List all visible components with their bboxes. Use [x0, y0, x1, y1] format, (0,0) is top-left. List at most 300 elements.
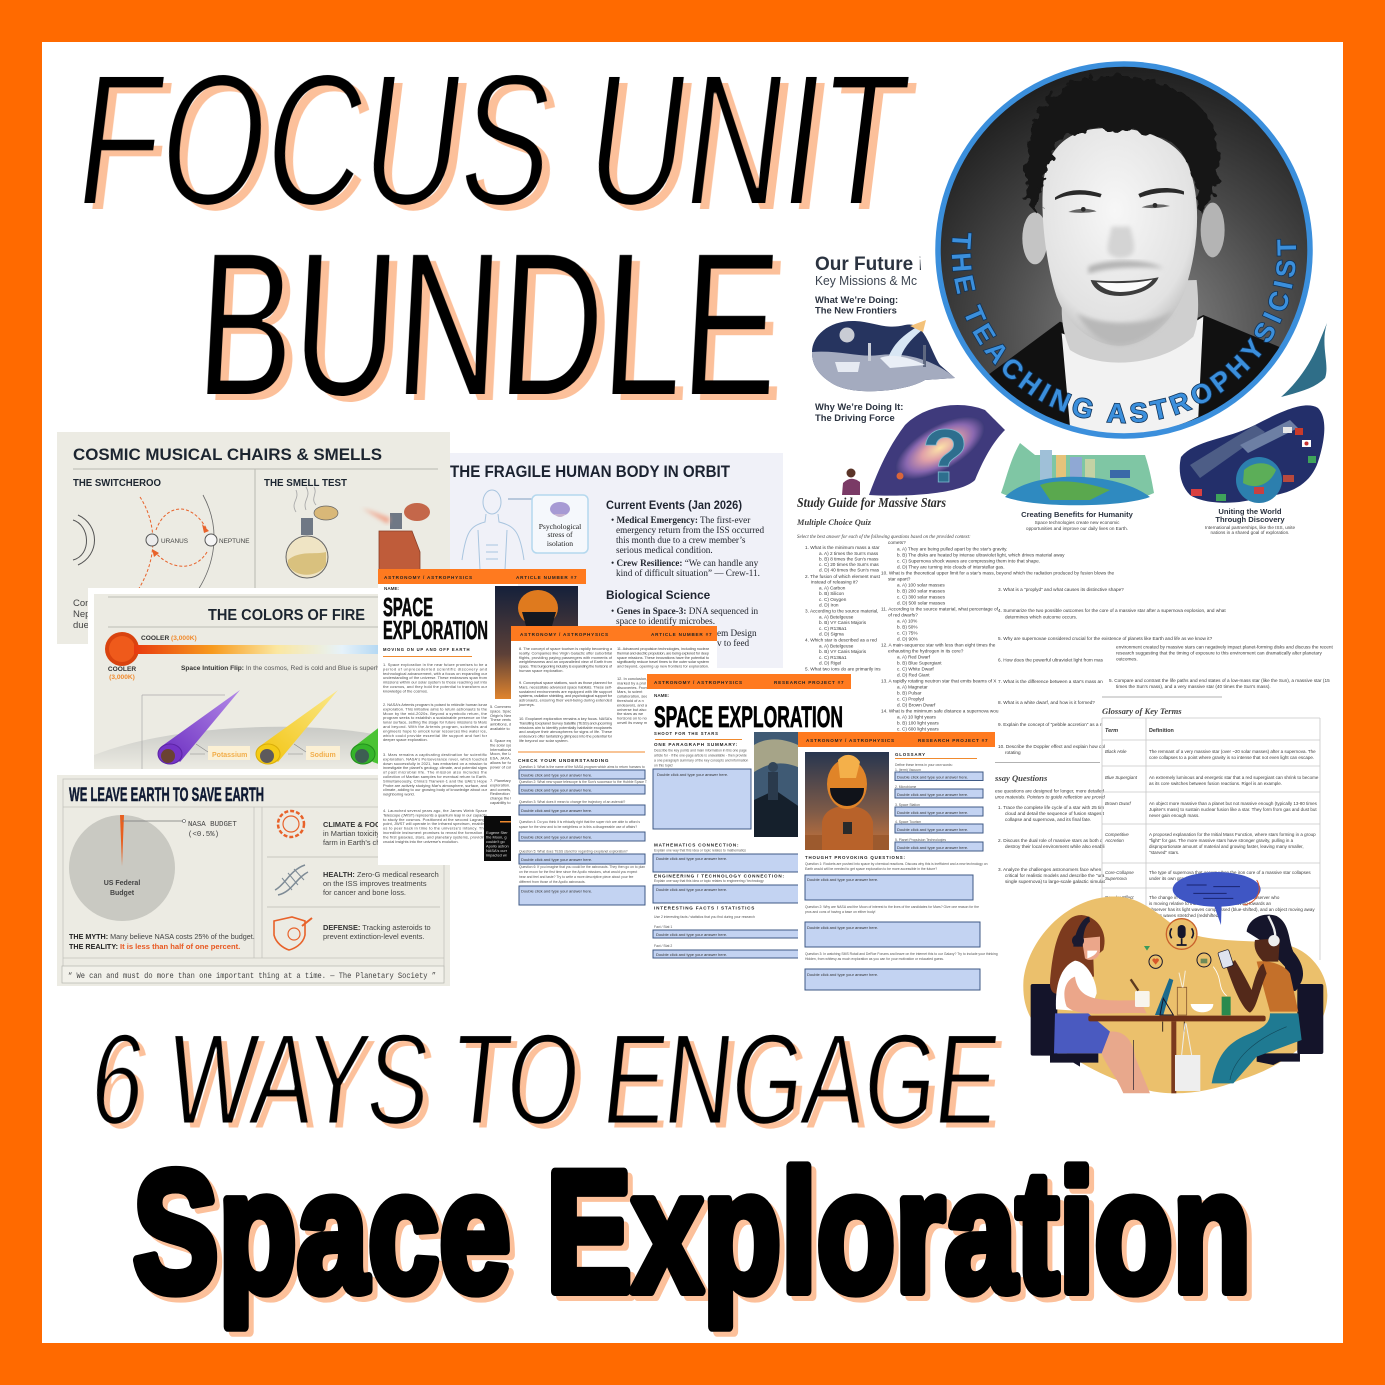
illustration: green city and earth — [1001, 443, 1154, 505]
quiz column two: exhausting the hydrogen in its core? — [888, 648, 964, 654]
check your understanding: CHECK YOUR UNDERSTANDING — [518, 758, 609, 763]
second column: Origin's New Gle — [490, 713, 519, 718]
callout: psychological stress of isolation: Psychological — [539, 522, 581, 531]
icon: microphone — [1166, 919, 1197, 949]
text block: current events: Current Events (Jan 2026) — [606, 498, 742, 512]
glossary of key terms table: Brown Dwarf — [1105, 801, 1132, 806]
glossary of key terms table: Definition — [1149, 728, 1174, 734]
article text: 9. Conceptual space stations, such as those planned for — [519, 680, 613, 685]
ROI row: health — [275, 865, 439, 897]
quiz column one: a. A) Betelgeuse — [819, 614, 854, 620]
glossary section: 1. (term) Vacuum — [895, 768, 921, 772]
header bar: ASTRONOMY / ASTROPHYSICS — [384, 575, 473, 580]
short answer questions: 10. Describe the Doppler effect and explain how col — [998, 744, 1105, 749]
glossary of key terms table — [1102, 706, 1320, 960]
article text: 1. Space exploration in the near future promises to be a — [383, 662, 488, 667]
illustration: lighthouse sliver — [1281, 323, 1327, 397]
essay questions: single supernova) to large-scale galactic simulat — [1005, 879, 1105, 884]
summary section: ONE PARAGRAPH SUMMARY: — [654, 742, 738, 747]
thought provoking questions — [805, 855, 998, 990]
glossary of key terms table: Doppler Effect — [1105, 895, 1134, 900]
glossary of key terms table: Competitive — [1105, 832, 1129, 837]
subheading: what we're doing — [815, 294, 898, 316]
icon: red perfume bottle — [362, 503, 430, 590]
label: cooler bar: COOLER (3,000K) — [141, 635, 197, 642]
header bar — [647, 674, 851, 689]
ROI row: climate and food: in Martian toxicity — [323, 829, 380, 838]
check your understanding: Question 2: What new space telescope is the Sun's successor to the Hubble Space T — [519, 780, 647, 784]
worksheet: article page two — [511, 626, 717, 907]
quiz column two: b. B) Blue Supergiant — [897, 660, 942, 666]
article text: point, JWST will operate in the infrared spectrum, enabling — [383, 821, 487, 826]
interesting facts: Use 2 interesting facts / statistics that you find during your research — [654, 915, 755, 919]
article text: flights, providing paying passengers with moments of — [519, 655, 613, 660]
article text: missions aim to identify potentially habitable exoplanets — [519, 725, 612, 730]
quote — [62, 966, 444, 983]
caption: creating benefits: Creating Benefits for Humanity — [1021, 510, 1134, 519]
panel: cosmic musical chairs and smells: Nep — [73, 609, 90, 620]
glossary of key terms table: Accretion — [1104, 838, 1124, 843]
thought provoking questions: THOUGHT PROVOKING QUESTIONS: — [805, 855, 906, 860]
mathematics connection: MATHEMATICS CONNECTION: — [654, 842, 739, 848]
header bar — [511, 626, 717, 641]
panel: our future in space — [800, 240, 1335, 535]
interesting facts — [653, 906, 800, 958]
glossary of key terms table: never gain enough mass. — [1149, 813, 1200, 818]
essay questions: urce materials. Pointers to guide reflection are provid — [995, 794, 1105, 800]
quiz column one: 1. What is the minimum mass a star — [805, 545, 880, 550]
ROI row: climate and food: farm in Earth’s cha — [323, 838, 385, 847]
short answer questions: rotating — [1005, 750, 1021, 755]
ROI row: defense — [274, 917, 431, 950]
article text: threshold of a n — [617, 698, 644, 703]
glossary of key terms table: as its core switches between fusion reactions. Rigel is an example. — [1149, 781, 1282, 786]
quiz column one: a. A) Betelgeuse — [819, 644, 854, 648]
article text: climate, adding to our growing body of knowledge about our — [383, 787, 488, 792]
article text: collection of Martian samples for eventual return to Earth. — [383, 774, 487, 779]
photo: astronaut in orange suit — [805, 752, 889, 850]
article text: Simultaneously, China's Tianwen-1 and the UAE's Hope — [383, 778, 487, 783]
quiz column two: 13. A rapidly rotating neutron star that emits beams of X — [881, 678, 997, 684]
subheading: why we're doing it: Why We’re Doing It: — [815, 401, 903, 412]
heading: study guide: Study Guide for Massive Stars — [797, 495, 946, 510]
panel: cosmic musical chairs and smells — [57, 432, 450, 644]
engineering connection — [653, 874, 800, 903]
second column: change the traje — [490, 796, 518, 801]
second column: 5. Commercial s — [490, 704, 518, 709]
panel: cosmic musical chairs and smells: due — [73, 620, 89, 631]
text: myth and reality: THE REALITY: It is less than half of one percent. — [69, 942, 240, 951]
black callout box: couldn't go — [486, 839, 505, 844]
article text: 8. The concept of space tourism is rapidly becoming a — [519, 646, 613, 651]
quiz column one: a. A) Carbon — [819, 586, 846, 590]
ROI row: health: on the ISS improves treatments — [323, 879, 427, 888]
article text: exploration. NASA's Perseverance rover, which touched — [383, 756, 487, 761]
summary section: Double click and type your answer here. — [657, 772, 728, 777]
subheading: the switcheroo: THE SWITCHEROO — [73, 478, 161, 489]
second column: available to eve — [490, 726, 517, 731]
yellow blob background — [1023, 897, 1327, 1093]
article text: life beyond our solar system. — [519, 738, 569, 743]
ROI row: defense: DEFENSE: Tracking asteroids to — [323, 923, 431, 932]
glossary section — [895, 752, 983, 851]
quiz column one: b. B) Silicon — [819, 591, 844, 596]
article text: program seeks to establish a sustainable presence on the — [383, 715, 487, 720]
check your understanding: Question 6: If you imagine that you could be the astronauts. They then go on to plan — [519, 865, 645, 869]
icon: purple comet potassium — [158, 690, 250, 764]
quiz column two: b. B) Pulsar — [897, 690, 922, 696]
article text: the stars as we — [617, 711, 643, 716]
quiz column two: c. C) Proplyd — [897, 696, 924, 702]
chart: federal budget pie: (<0.5%) — [188, 831, 219, 839]
article text: neighboring world. — [383, 792, 415, 797]
quiz column one: d. D) Sigma — [819, 632, 844, 636]
interesting facts: INTERESTING FACTS / STATISTICS — [654, 906, 755, 910]
glossary section: GLOSSARY — [895, 752, 926, 757]
quiz column two: d. D) Brown Dwarf — [897, 702, 936, 708]
quiz column one — [805, 545, 881, 672]
glossary of key terms table: Glossary of Key Terms — [1102, 706, 1182, 716]
second column: allows for future — [490, 760, 517, 765]
glossary of key terms table: Supernova — [1105, 876, 1127, 881]
article text: period of unprecedented scientific discovery and — [383, 666, 487, 671]
curved badge name: THE TEACHING ASTROPHYSICIST — [951, 232, 1297, 424]
glossary of key terms table: is moving relative to the source. An object moving towards an — [1149, 901, 1272, 906]
chart: federal budget pie: Budget — [110, 890, 135, 897]
header bar — [798, 732, 995, 747]
text: myth and reality: THE MYTH: Many believe NASA costs 25% of the budget. — [69, 932, 255, 941]
article text: 2. NASA's Artemis program is poised to rekindle human lunar — [383, 702, 488, 707]
essay questions — [994, 773, 1105, 884]
caption: creating benefits: Space technologies create new economic — [1035, 520, 1120, 525]
illustration: galaxy question mark — [869, 404, 1005, 499]
header bar: ASTRONOMY / ASTROPHYSICS — [806, 738, 895, 743]
quiz column two: 11. According to the source material, what percentage of — [881, 606, 999, 612]
quiz column one: 3. According to the source material, — [805, 608, 878, 614]
article text: which could provide essential life support and fuel for — [383, 733, 488, 738]
callout: psychological stress of isolation — [532, 495, 588, 553]
second column: International sp — [490, 747, 517, 752]
article text: Transiting Exoplanet Survey Satellite (TESS) and upcoming — [519, 720, 612, 725]
article title: SPACE — [383, 592, 433, 622]
diagram: Uranus and Neptune orbit swap — [73, 495, 250, 590]
article text: down successfully in 2021, has embarked on a mission to — [383, 761, 487, 766]
quiz column two: 12. A main-sequence star with less than eight times the — [881, 642, 996, 648]
header bar: ASTRONOMY / ASTROPHYSICS — [654, 680, 743, 685]
article text: astronauts, ensuring their well-being during extended — [519, 698, 612, 703]
heading: our future: Key Missions & Mc — [815, 274, 917, 288]
black callout box: Eugene Ster — [486, 830, 508, 835]
quiz column two: d. D) Red Giant — [897, 672, 930, 678]
icon: red sun — [105, 632, 139, 666]
subheading: the smell test: THE SMELL TEST — [264, 478, 347, 489]
short answer questions: 4. Summarize the two possible outcomes for the core of a massive star after a supernova explosion, and what — [998, 608, 1226, 613]
thought provoking questions: Hidden, from whitesy as much exploration as you can for your motivation or educated guess. — [805, 957, 944, 961]
check your understanding: Double click and type your answer here. — [521, 808, 592, 813]
second column — [490, 704, 522, 805]
quiz column two: c. C) 75% — [897, 630, 918, 636]
ROI row: climate and food — [278, 811, 387, 847]
text block: biological science: Biological Science — [606, 588, 711, 602]
ROI row: health: for cancer and bone loss. — [323, 888, 406, 897]
quiz column two: a. A) 10% — [897, 618, 917, 624]
check your understanding: Double click and type your answer here. — [521, 788, 592, 792]
quiz column two: b. B) The disks are heated by intense ultraviolet light, which drives material away — [897, 552, 1065, 558]
heading: 6 ways to engage — [85, 1006, 1011, 1157]
header bar: ASTRONOMY / ASTROPHYSICS — [520, 632, 609, 637]
quiz column one: c. C) R136a1 — [819, 655, 847, 660]
quiz column one: c. C) Oxygen — [819, 597, 847, 602]
thought provoking questions: Question 2: Why are NASA and the Moon of interest to the lives of the candidates for Mars? Give one reason for the — [805, 905, 979, 909]
title: Focus Unit: FOCUS UNIT — [75, 41, 926, 252]
essay questions: cloud and detail the sequence of fusion stages t — [1005, 811, 1105, 816]
black callout box: impacted wi — [486, 852, 507, 858]
short answer questions: 6. How does the powerful ultraviolet light from mas — [998, 658, 1104, 662]
second column: Moon, the Lunar — [490, 751, 519, 756]
left listener — [1031, 915, 1150, 1093]
essay questions: critical for realistic models and describe the "ura — [1005, 873, 1105, 878]
heading: fragile human body: THE FRAGILE HUMAN BODY IN ORBIT — [450, 462, 731, 481]
engineering connection: Explain one way that this idea or topic relates to engineering / technology — [654, 879, 764, 883]
essay questions: ese questions are designed for longer, more detailed — [995, 788, 1105, 794]
icon: small person looking up — [842, 468, 860, 495]
essay text right column: outcomes. — [1116, 656, 1138, 662]
items on the table — [1131, 967, 1231, 1015]
article text: and beyond. With the Artemis program, scientists and — [383, 724, 487, 729]
glossary of key terms table: An object more massive than a planet but not massive enough (typically 13-80 times — [1149, 801, 1318, 806]
check your understanding: Question 3: What does it mean to change the trajectory of an asteroid? — [519, 800, 625, 804]
article text: sustained environments are equipped with life support — [519, 689, 613, 694]
article text: significantly reduce travel times to the outer solar system — [617, 659, 709, 664]
text block: biological science — [606, 588, 759, 648]
article text: technological advancement, with a focus on expanding our — [383, 671, 488, 676]
second column: power of collab — [490, 764, 516, 769]
article title: SPACE EXPLORATION — [654, 701, 843, 734]
essay questions: 1. Trace the complete life cycle of a star with 25 tim — [998, 805, 1104, 810]
quiz column one: c. C) 20 times the Sun's mas — [819, 562, 879, 567]
glossary of key terms table: Jupiter's mass) to sustain nuclear fusion like a star. They form from gas and dust but — [1149, 807, 1317, 812]
article title — [383, 592, 488, 645]
short answer questions: 5. Why are supernovae considered crucial for the existence of planets like Earth and life as we know it? — [998, 636, 1213, 641]
check your understanding: Question 4: Do you think it is ethically right that the super rich are able to afford s — [519, 820, 640, 824]
diagram: Uranus and Neptune orbit swap: URANUS — [161, 538, 188, 545]
article text: knowledge of the cosmos. — [383, 688, 428, 693]
short answer questions: 7. What is the difference between a star's mass an — [998, 679, 1103, 684]
right listener — [1212, 915, 1323, 1083]
thought provoking questions: Double click and type your answer here. — [807, 925, 878, 930]
quiz column two — [881, 540, 1114, 732]
text block: current events: emergency return from the ISS occurred — [616, 525, 764, 535]
article text: space. This burgeoning industry is expanding the horizons of — [519, 664, 613, 669]
second column: exploration. Mis — [490, 782, 517, 787]
article text: and analyze their atmospheres for signs of life. These — [519, 729, 612, 734]
icon: human body outline — [462, 490, 532, 570]
chart: federal budget pie — [69, 815, 237, 921]
check your understanding: Question 1: What is the name of the NASA program which aims to return humans to — [519, 765, 645, 769]
cut-off caption: Con — [73, 598, 90, 609]
quiz column one: d. D) 40 times the Sun's mas — [819, 568, 880, 572]
article text: exploration. This initiative aims to return astronauts to the — [383, 706, 487, 711]
glossary of key terms table: Core-Collapse — [1105, 870, 1134, 875]
essay text right column: research suggesting that the timing of exposure to this environment can dramatically alter planetary — [1116, 650, 1322, 656]
subheading: multiple choice quiz: Multiple Choice Quiz — [796, 518, 872, 527]
subheading: what we're doing: What We’re Doing: — [815, 294, 898, 305]
illustration: galaxy question mark: ? — [922, 414, 968, 499]
article text: journeys. — [518, 702, 535, 707]
text: space intuition flip: Space Intuition Flip: In the cosmos, Red is cold and Blue is superhe — [181, 665, 384, 672]
panel: the colors of fire — [88, 588, 450, 770]
caption: creating benefits: opportunities and improve our daily lives on Earth. — [1026, 526, 1128, 531]
check your understanding: Double click and type your answer here. — [521, 772, 592, 778]
glossary of key terms table: core collapses to a point where gravity is so intense that not even light can escape. — [1149, 755, 1314, 760]
ROI row: climate and food: CLIMATE & FOOD — [323, 820, 387, 829]
second column: ESA, JAXA, and o — [490, 756, 522, 761]
essay questions: destroy their local environment while also enabli — [1005, 844, 1105, 849]
article text: of past microbial life. The mission also includes the — [383, 770, 487, 775]
quiz column one: b. B) VY Canis Majoris — [819, 620, 867, 625]
article text: Telescope (JWST) represents a quantum leap in our capacity — [383, 812, 487, 817]
chart: federal budget pie: US Federal — [104, 880, 140, 887]
glossary section: Double click and type your answer here. — [897, 792, 968, 797]
diagram: Uranus and Neptune orbit swap: NEPTUNE — [219, 538, 250, 545]
article text: human space exploration. — [519, 668, 564, 673]
essay text right column — [1109, 644, 1333, 689]
caption: uniting the world — [1205, 507, 1296, 535]
text block: current events: • Crew Resilience: “We can handle any — [611, 558, 759, 568]
quiz column one: d. D) Iron — [819, 602, 839, 608]
panel: we leave earth to save earth — [57, 775, 450, 986]
glossary section: Double click and type your answer here. — [897, 827, 968, 832]
engineering connection: ENGINEERING / TECHNOLOGY CONNECTION: — [654, 874, 785, 878]
glossary section: Double click and type your answer here. — [897, 774, 968, 780]
article text: understanding of the universe. These endeavors span from — [383, 675, 487, 680]
heading: cosmic musical chairs: COSMIC MUSICAL CHAIRS & SMELLS — [73, 445, 382, 464]
callout: psychological stress of isolation: isolation — [547, 539, 573, 548]
heading: colors of fire: THE COLORS OF FIRE — [208, 607, 365, 624]
summary section — [653, 742, 751, 829]
essay questions: 2. Discuss the dual role of massive stars as both d — [998, 838, 1103, 843]
caption: uniting the world: International partnerships, like the ISS, unite — [1205, 525, 1296, 530]
quiz column two: 10. What is the theoretical upper limit for a star's mass, beyond which the radiation produced by fusion blows the — [881, 570, 1114, 576]
glossary of key terms table: observer has its light waves compressed (blue-shifted), and an object moving away — [1149, 907, 1315, 912]
article text: to study the cosmos. Positioned at the second Lagrange — [383, 817, 487, 822]
second column: 7. Planetary defe — [490, 778, 519, 783]
quiz column one: b. B) VY Canis Majoris — [819, 649, 867, 654]
essay questions: collapse and supernova, and its final fate. — [1005, 817, 1091, 822]
article text: crucial insights into the universe's evolution. — [383, 839, 459, 844]
header bar: RESEARCH PROJECT #7 — [774, 680, 844, 685]
header bar — [378, 569, 586, 584]
glossary of key terms table: Blue Supergiant — [1105, 775, 1138, 780]
article text: unveil its many mys — [617, 720, 651, 725]
icon: yellow comet sodium — [256, 690, 340, 764]
article text: space missions. These innovations have the potential to — [617, 655, 709, 660]
header bar: ARTICLE NUMBER #7 — [651, 632, 712, 637]
temperature gradient bar — [134, 645, 394, 654]
summary section: a one paragraph summary of the key concepts and information — [654, 758, 748, 762]
article text: the first galaxies, stars, and planetary systems, providing — [383, 834, 487, 839]
engineering connection: Double click and type your answer here. — [656, 887, 727, 892]
glossary of key terms table: The remnant of a very massive star (over ~20 solar masses) after a supernova. The — [1149, 749, 1316, 754]
icon: round perfume bottle — [286, 487, 338, 578]
text block: biological science: • Genes in Space-3: DNA sequenced in — [611, 606, 759, 616]
thought provoking questions: Question 3: In watching SMS Rotail and DeRoe Forums and leave on the internet this to our Galaxy? Try to include your thinking — [805, 952, 998, 956]
article text: collaboration, see — [617, 694, 648, 699]
glossary section: Define these terms in your own words: — [895, 763, 953, 767]
quiz column two: d. D) They are turning into clouds of interstellar gas. — [897, 564, 1005, 570]
interesting facts: Fact / Stat 1 — [654, 925, 672, 929]
article text: engineers hope to unlock lunar resources like water ice, — [383, 728, 487, 733]
chart: federal budget pie: NASA BUDGET — [188, 821, 237, 829]
glossary of key terms table: "fight" for gas. The more massive stars have stronger gravity, pulling in a — [1149, 838, 1294, 843]
article text: thermal and electric propulsion, are being explored for deep — [617, 650, 709, 655]
worksheet: article page one: MOVING ON UP AND OFF EARTH — [383, 647, 470, 652]
article text: endeavors, and ad — [617, 702, 649, 707]
essay text right column: environment created by massive stars can negatively impact planet-forming disks and discuss the recent — [1116, 644, 1333, 650]
check your understanding — [518, 758, 647, 905]
quiz column two: d. D) 90% — [897, 636, 918, 642]
thought provoking questions: Question 1: Rockets are pushed into space by chemical reactions. Discuss why this is inefficient and a new technology on — [805, 862, 988, 866]
glossary of key terms table: The change in frequency of a wave in relation to an observer who — [1149, 895, 1280, 900]
essay text right column: 5. Compare and contrast the life paths and end states of a low-mass star (like the Sun), a massive star (15 — [1109, 678, 1330, 683]
quiz column one: 4. Which star is described as a red — [805, 638, 877, 642]
article text: Probe are actively studying Mar's atmosphere, surface, and — [383, 783, 487, 788]
essay questions: 3. Analyze the challenges astronomers face when — [998, 867, 1102, 872]
article text: lunar surface, setting the stage for future missions to Mars — [383, 720, 487, 725]
text block: current events: kind of difficult situation” — Crew-11. — [616, 568, 760, 578]
article text: 3. Mars remains a captivating destination for scientific — [383, 752, 487, 757]
caption: creating benefits — [1021, 510, 1134, 531]
caption: uniting the world: Uniting the World — [1218, 507, 1282, 516]
text block: current events — [606, 498, 764, 578]
text block: current events: • Medical Emergency: The first-ever — [611, 515, 750, 525]
title: Focus Unit: FOCUS UNIT — [67, 35, 918, 246]
quiz column one: instead of releasing it? — [811, 580, 858, 584]
quiz column two: b. B) 200 solar masses — [897, 588, 946, 594]
icon: purple comet potassium: Potassium — [212, 752, 247, 759]
summary section: on this topic! — [654, 764, 673, 768]
article text: Mars, to scient — [617, 689, 643, 694]
second column: and comets, crud — [490, 787, 520, 792]
glossary section: 3. Space Station — [895, 803, 920, 807]
illustration: moon base — [812, 320, 955, 391]
interesting facts: Double click and type your answer here. — [656, 932, 727, 937]
second column: Redirection Test — [490, 791, 519, 796]
worksheet: research project page one: SHOOT FOR THE STARS — [654, 731, 719, 736]
check your understanding: on the moon for the first time since the Apollo missions, what would you expect — [519, 870, 637, 874]
label: cooler sun: (3,000K) — [109, 674, 135, 681]
check your understanding: Double click and type your answer here. — [521, 857, 592, 862]
worksheet: article page one: NAME: — [384, 586, 400, 591]
quote: “ We can and must do more than one important thing at a time. — The Planetary Society ” — [68, 973, 436, 981]
article text: universe but also — [617, 707, 646, 712]
table — [1088, 1016, 1266, 1093]
ground curve — [94, 727, 450, 769]
instructions: Select the best answer for each of the following questions based on the provided context: — [797, 535, 971, 540]
article text — [518, 646, 710, 743]
short answer questions — [998, 587, 1226, 755]
header bar: ARTICLE NUMBER #7 — [516, 575, 577, 580]
quiz column two: b. B) 50% — [897, 624, 918, 630]
glossary of key terms table: under its own gravity. — [1149, 876, 1191, 881]
thought provoking questions: Earth would will be needed to get space exploration to be more accessible in the future? — [805, 867, 937, 871]
glossary section: 4. Space Tourism — [895, 820, 921, 824]
document: study guide for massive stars — [796, 495, 1333, 960]
check your understanding: space for the view and to be weightless or is this a disagreeable use of affairs? — [519, 825, 637, 829]
worksheet: research project page one — [647, 674, 851, 958]
quiz column one: c. C) R136a1 — [819, 626, 847, 631]
quiz column one: d. D) Rigel — [819, 660, 841, 666]
